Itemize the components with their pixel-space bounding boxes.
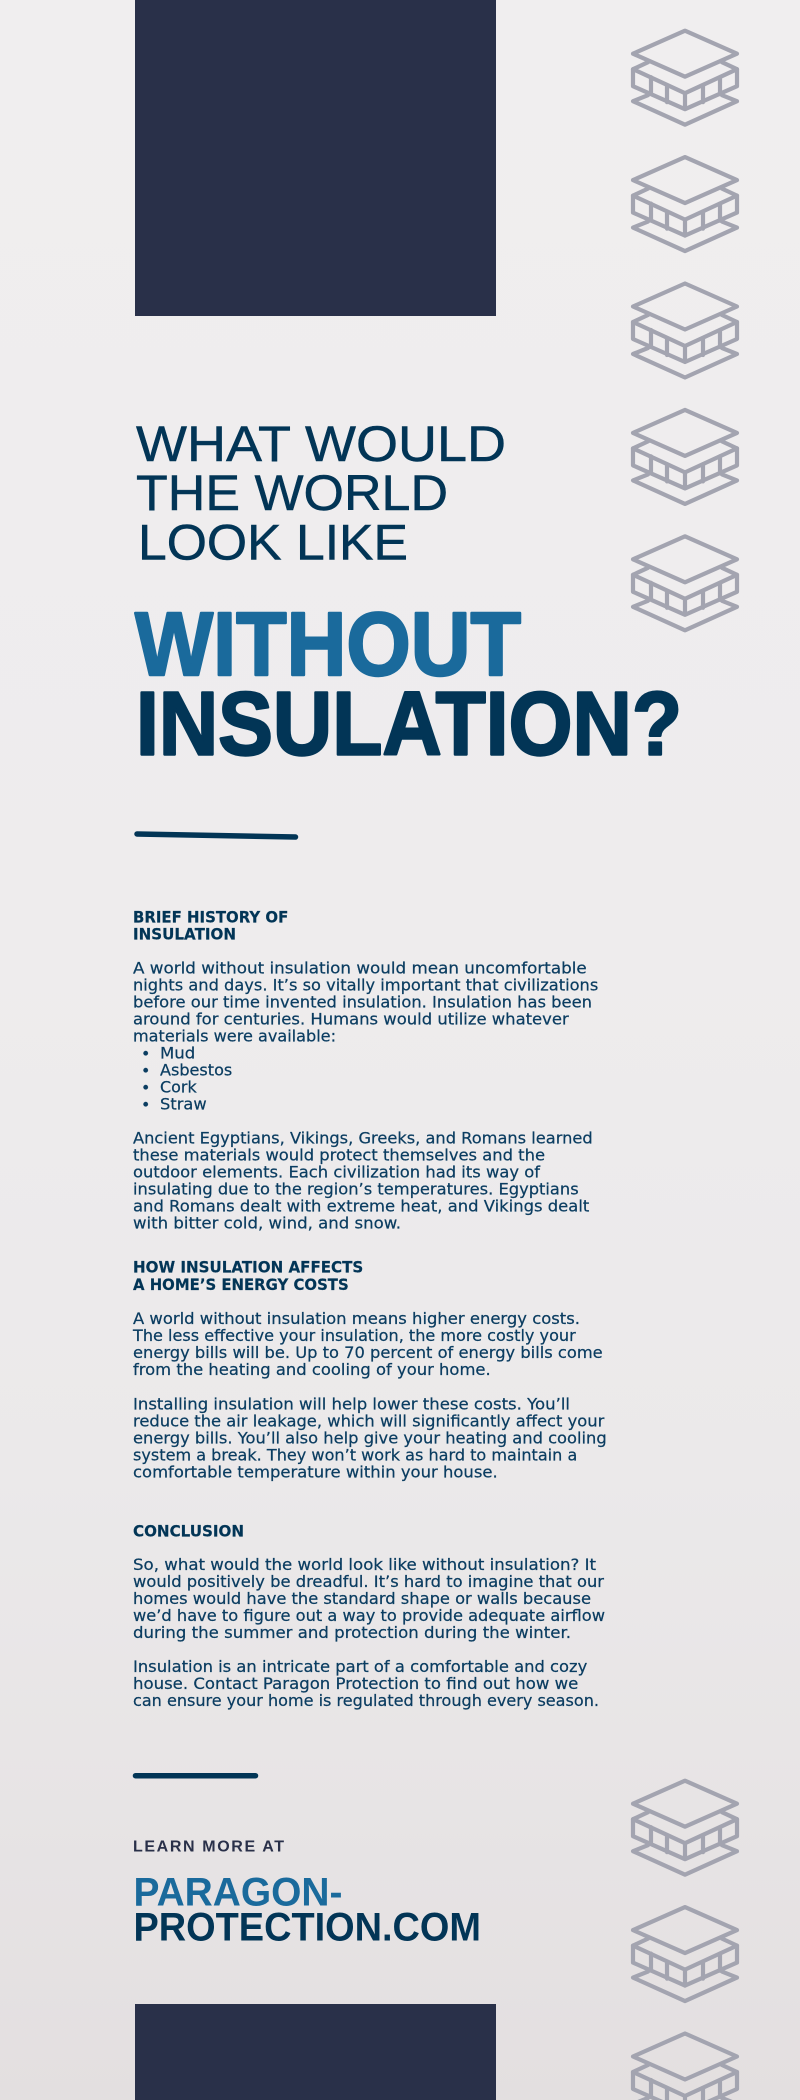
icon: insulation layers 4 (633, 410, 737, 504)
panel: conclusion (133, 1523, 605, 1710)
title: intro lines: LOOK LIKE (138, 514, 408, 570)
call to action: url: PARAGON- (134, 1871, 342, 1915)
text: history intro: materials were available: (133, 1027, 336, 1045)
text: history intro: before our time invented insulation. Insulation has been (133, 993, 592, 1011)
icon: insulation layers 8 (633, 2034, 737, 2100)
heading: energy costs (133, 1259, 363, 1294)
text: civilizations: with bitter cold, wind, and snow. (133, 1214, 401, 1232)
icon: insulation layers 7 (633, 1907, 737, 2001)
title: insulation: INSULATION? (136, 674, 682, 774)
heading: brief history: INSULATION (133, 925, 236, 943)
title: intro lines (136, 416, 506, 570)
text: history intro: A world without insulation would mean uncomfortable (133, 959, 587, 977)
heading: brief history: BRIEF HISTORY OF (133, 908, 288, 926)
list: materials: Cork (160, 1078, 197, 1096)
text: contact: house. Contact Paragon Protection to find out how we (133, 1675, 578, 1693)
text: installing insulation: energy bills. You’ll also help give your heating and cooling (133, 1429, 607, 1447)
text: civilizations: Ancient Egyptians, Vikings, Greeks, and Romans learned (133, 1129, 593, 1147)
heading: energy costs: A HOME’S ENERGY COSTS (133, 1276, 349, 1294)
text: installing insulation: reduce the air leakage, which will significantly affect your (133, 1412, 605, 1430)
icon: insulation layers 5 (633, 536, 737, 630)
divider: under title (137, 834, 296, 837)
icons: insulation column top (633, 31, 737, 630)
call to action: url: PROTECTION.COM (134, 1906, 481, 1950)
icons: insulation column bottom (633, 1781, 737, 2100)
text: installing insulation (133, 1395, 607, 1481)
text: history intro: around for centuries. Humans would utilize whatever (133, 1010, 569, 1028)
text: contact (133, 1658, 599, 1710)
heading: brief history (133, 908, 288, 943)
text: dreadful world: during the summer and protection during the winter. (133, 1624, 571, 1642)
title: intro lines: THE WORLD (136, 465, 448, 521)
text: history intro (133, 959, 598, 1045)
icon: insulation layers 1 (633, 31, 737, 125)
text: civilizations: outdoor elements. Each civilization had its way of (133, 1163, 541, 1181)
list: materials (143, 1044, 232, 1113)
text: dreadful world (133, 1556, 605, 1642)
text: dreadful world: So, what would the world look like without insulation? It (133, 1556, 596, 1574)
title: without: WITHOUT (135, 595, 521, 695)
text: installing insulation: comfortable temperature within your house. (133, 1463, 498, 1481)
navy block: top (135, 0, 496, 316)
list: materials: Mud (160, 1044, 195, 1062)
text: civilizations (133, 1129, 593, 1232)
icon: insulation layers 2 (633, 157, 737, 251)
text: higher costs: A world without insulation means higher energy costs. (133, 1310, 580, 1328)
text: higher costs: from the heating and cooling of your home. (133, 1361, 491, 1379)
text: dreadful world: would positively be dreadful. It’s hard to imagine that our (133, 1573, 605, 1591)
icon: insulation layers 6 (633, 1781, 737, 1875)
text: installing insulation: system a break. They won’t work as hard to maintain a (133, 1446, 577, 1464)
call to action: url (134, 1871, 481, 1950)
text: higher costs (132, 1310, 603, 1379)
title: intro lines: WHAT WOULD (136, 416, 506, 472)
text: dreadful world: homes would have the standard shape or walls because (133, 1590, 591, 1608)
divider: above call to action (136, 1773, 256, 1778)
icon: insulation layers 3 (633, 284, 737, 378)
list: materials: Asbestos (160, 1061, 232, 1079)
text: dreadful world: we’d have to figure out a way to provide adequate airflow (133, 1607, 605, 1625)
heading: conclusion: CONCLUSION (133, 1523, 244, 1541)
call to action: learn more: LEARN MORE AT (133, 1839, 284, 1856)
text: higher costs: energy bills will be. Up to 70 percent of energy bills come (133, 1344, 603, 1362)
text: civilizations: these materials would protect themselves and the (133, 1146, 545, 1164)
navy block: bottom (135, 2004, 496, 2100)
panel: brief history (133, 908, 598, 1232)
heading: energy costs: HOW INSULATION AFFECTS (133, 1259, 363, 1277)
list: materials: Straw (160, 1095, 207, 1113)
panel: energy costs (132, 1259, 607, 1481)
text: civilizations: and Romans dealt with extreme heat, and Vikings dealt (133, 1197, 589, 1215)
text: contact: Insulation is an intricate part of a comfortable and cozy (133, 1658, 587, 1676)
text: contact: can ensure your home is regulated through every season. (133, 1692, 599, 1710)
text: civilizations: insulating due to the region’s temperatures. Egyptians (133, 1180, 579, 1198)
text: higher costs: The less effective your insulation, the more costly your (132, 1327, 576, 1345)
title (135, 416, 682, 774)
text: history intro: nights and days. It’s so vitally important that civilizations (133, 976, 598, 994)
text: installing insulation: Installing insulation will help lower these costs. You’ll (133, 1395, 570, 1413)
